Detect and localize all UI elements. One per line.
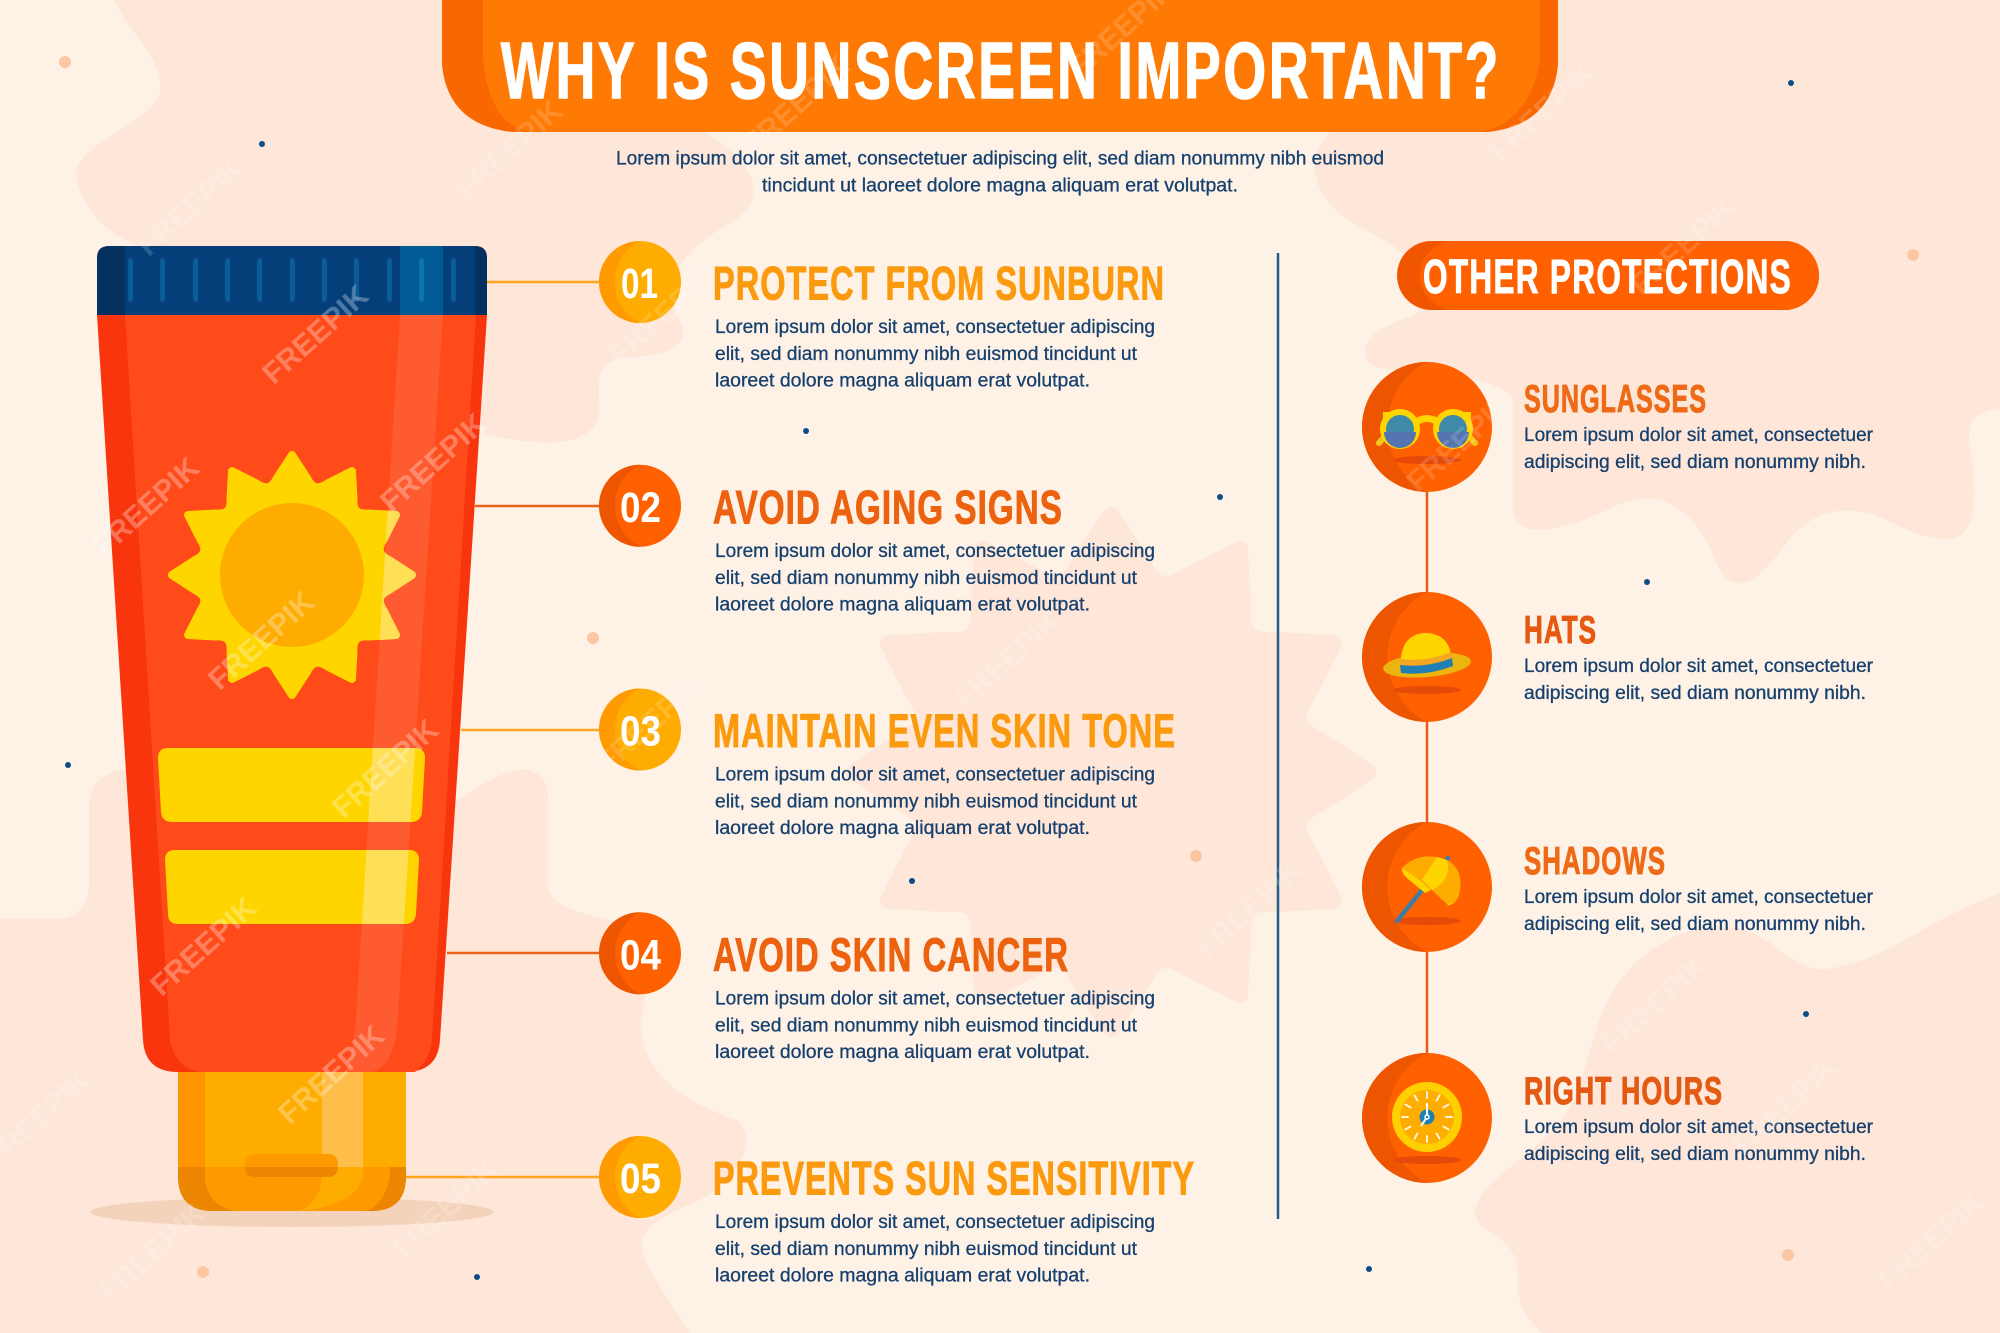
highlight over labels (362, 510, 416, 924)
other protections pill (1397, 241, 1819, 310)
watermarks: FREEPIK (948, 604, 1067, 716)
text 04: Lorem ipsum dolor sit amet, consectetuer adipiscing (715, 988, 1155, 1009)
number badge 02 (599, 465, 681, 547)
title banner (442, 0, 1558, 132)
text 01 (715, 317, 1155, 392)
text: sunglasses: Lorem ipsum dolor sit amet, consectetuer (1524, 425, 1874, 446)
watermarks: FREEPIK (590, 668, 709, 780)
watermarks: FREEPIK (374, 407, 493, 519)
text: sunglasses: adipiscing elit, sed diam nonummy nibh. (1524, 452, 1866, 473)
watermarks: FREEPIK (1483, 56, 1602, 168)
protection: sunglasses (1362, 362, 1874, 492)
number badge 04: 04 (620, 931, 661, 979)
heading 04: AVOID SKIN CANCER (713, 928, 1069, 981)
watermarks: FREEPIK (87, 451, 206, 563)
other protections pill: OTHER PROTECTIONS (1423, 251, 1792, 304)
text: hats: adipiscing elit, sed diam nonummy nibh. (1524, 683, 1866, 704)
item 03 (599, 688, 1176, 839)
column divider (1277, 253, 1279, 1219)
watermarks: FREEPIK (1190, 853, 1309, 965)
item 01 (599, 241, 1165, 392)
watermarks: FREEPIK (93, 1197, 212, 1309)
title: WHY IS SUNSCREEN IMPORTANT? (501, 26, 1501, 115)
timeline connector (1426, 490, 1428, 1055)
item 05 (599, 1136, 1195, 1286)
number badge 03: 03 (620, 708, 661, 756)
tube nozzle end (178, 1072, 406, 1211)
protection: hats (1362, 592, 1874, 722)
watermarks: FREEPIK (1400, 387, 1519, 499)
text: hats (1524, 656, 1874, 704)
watermarks: FREEPIK (272, 1019, 391, 1131)
text 01: Lorem ipsum dolor sit amet, consectetuer adipiscing (715, 317, 1155, 338)
watermarks: FREEPIK (1595, 949, 1714, 1061)
text: shadows: Lorem ipsum dolor sit amet, consectetuer (1524, 887, 1874, 908)
text 02: elit, sed diam nonummy nibh euismod tincidunt ut (715, 568, 1138, 589)
item 04 (599, 912, 1155, 1063)
text 01: elit, sed diam nonummy nibh euismod tincidunt ut (715, 344, 1138, 365)
watermarks: FREEPIK (131, 151, 250, 263)
heading: shadows: SHADOWS (1524, 840, 1666, 883)
text 02 (715, 541, 1155, 615)
heading 03: MAINTAIN EVEN SKIN TONE (713, 704, 1176, 757)
text: shadows: adipiscing elit, sed diam nonummy nibh. (1524, 914, 1866, 935)
text 04: elit, sed diam nonummy nibh euismod tincidunt ut (715, 1015, 1138, 1036)
number badge 01: 01 (621, 260, 658, 308)
heading: sunglasses: SUNGLASSES (1524, 378, 1707, 421)
number badge 05 (599, 1136, 681, 1218)
number badge 02: 02 (620, 484, 661, 532)
text 03: laoreet dolore magna aliquam erat volutpat. (715, 818, 1090, 839)
subtitle (616, 148, 1384, 196)
icon: umbrella (1362, 822, 1492, 952)
heading 02: AVOID AGING SIGNS (713, 480, 1063, 533)
heading 01: PROTECT FROM SUNBURN (713, 256, 1165, 310)
icon: clock (1362, 1053, 1492, 1183)
leader lines (406, 282, 610, 1177)
watermarks: FREEPIK (144, 891, 263, 1003)
number badge 03 (599, 688, 681, 770)
icon: sunglasses (1362, 362, 1492, 492)
sunscreen tube illustration (90, 246, 494, 1227)
number badge 01 (599, 241, 681, 323)
text 05: Lorem ipsum dolor sit amet, consectetuer adipiscing (715, 1212, 1155, 1233)
text 03: elit, sed diam nonummy nibh euismod tincidunt ut (715, 792, 1138, 812)
watermarks: FREEPIK (737, 49, 856, 161)
tube cap (97, 246, 487, 315)
heading 05: PREVENTS SUN SENSITIVITY (713, 1152, 1195, 1204)
watermarks: FREEPIK (326, 713, 445, 825)
watermarks: FREEPIK (386, 1153, 505, 1265)
text 01: laoreet dolore magna aliquam erat volutpat. (715, 370, 1090, 392)
icon: hat (1362, 592, 1492, 722)
text: right hours (1524, 1117, 1874, 1165)
text 02: Lorem ipsum dolor sit amet, consectetuer adipiscing (715, 541, 1155, 562)
tube shadow (90, 1197, 494, 1227)
watermarks: FREEPIK (1872, 1185, 1991, 1297)
text: right hours: adipiscing elit, sed diam nonummy nibh. (1524, 1144, 1866, 1165)
heading: hats: HATS (1524, 609, 1597, 652)
subtitle: tincidunt ut laoreet dolore magna aliquam erat volutpat. (762, 176, 1238, 196)
tube body (97, 315, 487, 1072)
text 04: laoreet dolore magna aliquam erat volutpat. (715, 1042, 1090, 1063)
watermarks: FREEPIK (1624, 190, 1743, 302)
text 05: laoreet dolore magna aliquam erat volutpat. (715, 1266, 1090, 1286)
protection: right hours (1362, 1053, 1874, 1183)
protection: shadows (1362, 822, 1874, 952)
text 05 (715, 1212, 1155, 1286)
sun logo (172, 455, 412, 695)
text 04 (715, 988, 1155, 1063)
watermarks: FREEPIK (1726, 1051, 1845, 1163)
text: right hours: Lorem ipsum dolor sit amet, consectetuer (1524, 1117, 1874, 1138)
number badge 04 (599, 912, 681, 994)
text 02: laoreet dolore magna aliquam erat volutpat. (715, 594, 1090, 615)
heading: right hours: RIGHT HOURS (1524, 1070, 1723, 1113)
number badge 05: 05 (620, 1155, 661, 1203)
text 05: elit, sed diam nonummy nibh euismod tincidunt ut (715, 1239, 1138, 1260)
watermarks: FREEPIK (603, 260, 722, 372)
text 03: Lorem ipsum dolor sit amet, consectetuer adipiscing (715, 764, 1155, 786)
subtitle: Lorem ipsum dolor sit amet, consectetuer adipiscing elit, sed diam nonummy nibh euismod (616, 148, 1384, 170)
text: hats: Lorem ipsum dolor sit amet, consectetuer (1524, 656, 1874, 677)
text: shadows (1524, 887, 1874, 935)
item 02 (599, 465, 1155, 615)
yellow label bars (158, 748, 425, 924)
watermarks: FREEPIK (202, 585, 321, 697)
watermarks: FREEPIK (256, 279, 375, 391)
text: sunglasses (1524, 425, 1874, 473)
watermarks: FREEPIK (450, 94, 569, 206)
text 03 (715, 764, 1155, 839)
